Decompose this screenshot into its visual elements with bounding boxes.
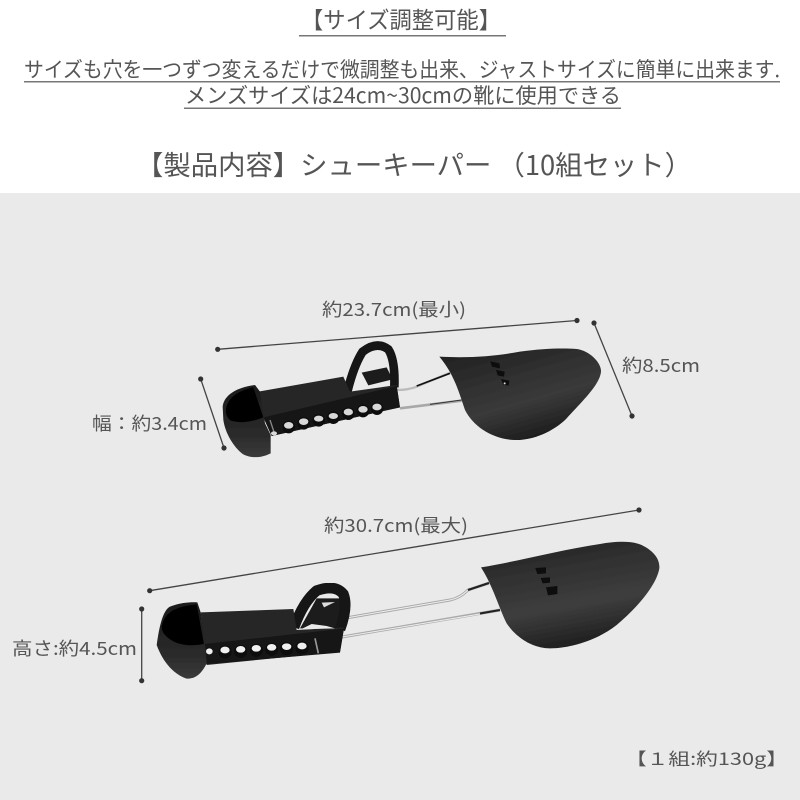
toe piece: short <box>439 349 601 440</box>
adjustment holes: short <box>271 402 383 435</box>
heading: adjustable size: 【サイズ調整可能】 <box>301 1 501 35</box>
wires: short <box>397 373 462 408</box>
dimension: toe width: 約8.5cm <box>622 352 700 378</box>
wires: long <box>342 583 500 637</box>
weight label: 【１組:約130g】 <box>625 745 788 770</box>
text block: size description: メンズサイズは24cm~30cmの靴に使用できる <box>185 80 621 110</box>
adjustment holes: long <box>206 642 308 658</box>
dimension: height: 高さ:約4.5cm <box>12 635 137 661</box>
heading: product contents: 【製品内容】シューキーパー （10組セット） <box>136 144 692 183</box>
dimension: maximum length <box>147 507 642 593</box>
shoe keeper: shortest position <box>223 346 601 457</box>
dimension: height <box>12 606 144 683</box>
dimension: maximum length: 約30.7cm(最大) <box>324 512 468 538</box>
shoe keeper: longest position <box>157 542 659 679</box>
toe piece: long <box>481 542 659 648</box>
heel cup and body: short <box>223 346 400 457</box>
dimension: minimum length <box>215 296 580 352</box>
dimension: heel width: 幅：約3.4cm <box>92 410 207 436</box>
dimension: minimum length: 約23.7cm(最小) <box>322 296 466 322</box>
dimension: heel width <box>92 376 227 451</box>
background panel <box>0 193 800 800</box>
heel cup and body: long <box>157 588 345 679</box>
text block: size description <box>24 54 780 110</box>
dimension: toe width <box>591 320 700 419</box>
